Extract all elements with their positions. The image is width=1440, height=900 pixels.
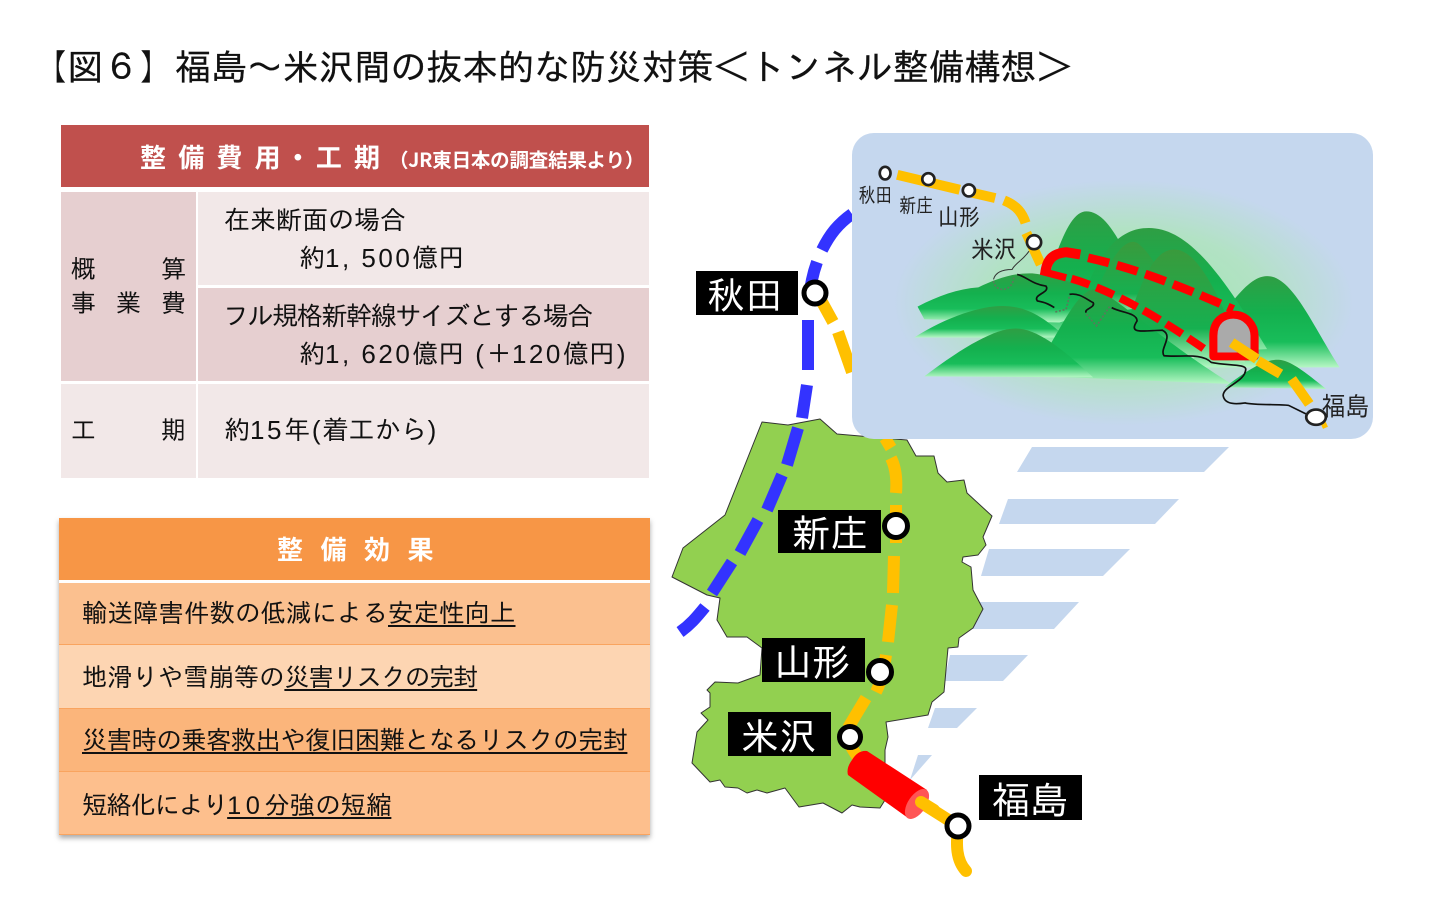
station: Yonezawa: 米沢 [741,717,817,759]
label text line 2: 業 [116,290,141,318]
river [994,251,1306,414]
cell text line 2: 約1, 620億円 (＋120億円) [299,339,626,369]
cell: construction period [198,384,649,478]
cell: full-size shinkansen cost [198,288,649,381]
label text [71,417,186,445]
benefit row 2 [59,645,650,709]
label text line 2: 費 [161,290,186,318]
label text line 1: 算 [161,256,186,284]
cell text line 2: 約1, 500億円 [299,243,464,273]
blue dashed rail line [680,214,852,632]
inset stations [880,167,1326,425]
cell: conventional section cost [198,192,649,285]
yellow line through portal [1232,342,1257,359]
cell text line 1: フル規格新幹線サイズとする場合 [223,301,592,331]
inset labels [858,185,1369,422]
red tunnel route [1041,252,1255,356]
cell text: 約15年(着工から) [224,415,436,445]
benefit row 4 [59,772,650,835]
benefit text: 輸送障害件数の低減による安定性向上 [82,600,516,628]
label text: 期 [161,417,186,445]
benefits heading [59,518,650,580]
inset labels: 秋田 [858,185,892,208]
benefit text: 地滑りや雪崩等の災害リスクの完封 [82,664,477,692]
heading text: 整備費用・工期 [140,138,392,175]
station: Yonezawa [728,712,860,759]
panel: tunnel detail inset [852,133,1373,439]
label text line 2 [71,290,186,318]
benefit row 1 [59,583,650,645]
yellow dashed rail line [822,302,966,871]
row label: construction period [61,384,196,478]
station: Yamagata: 山形 [774,643,850,685]
label text line 1 [71,256,186,284]
panel: benefits [59,518,650,835]
icon: tunnel cylinder [848,751,934,823]
station: Fukushima [947,775,1082,837]
decorative stripes [910,447,1229,780]
heading text: 整備効果 [277,530,451,567]
inset labels: 福島 [1322,392,1369,422]
heading source note: （JR東日本の調査結果より） [389,144,644,173]
station: Akita: 秋田 [707,276,783,318]
prefecture map [672,419,992,813]
table heading [61,125,649,187]
label text line 1: 概 [71,256,96,284]
station: Akita [696,271,826,318]
yellow line in inset [897,175,1325,428]
benefit text: 災害時の乗客救出や復旧困難となるリスクの完封 [82,727,627,755]
inset labels: 米沢 [971,236,1017,264]
label text line 2: 事 [71,290,96,318]
station: Yamagata [762,638,892,685]
inset mountain illustration [858,167,1369,428]
panel: cost and schedule table [61,125,649,478]
station: Shinjo: 新庄 [792,514,868,556]
benefit row 3 [59,709,650,772]
inset labels: 新庄 [899,194,933,217]
title: 【図６】福島～米沢間の抜本的な防災対策＜トンネル整備構想＞ [32,48,1072,88]
inset labels: 山形 [938,204,980,231]
benefit text: 短絡化により10分強の短縮 [82,792,391,820]
row label: estimated cost [61,192,196,381]
label text: 工 [71,417,96,445]
station: Fukushima: 福島 [992,781,1068,823]
station: Shinjo [778,510,908,556]
cell text line 1: 在来断面の場合 [224,205,406,235]
